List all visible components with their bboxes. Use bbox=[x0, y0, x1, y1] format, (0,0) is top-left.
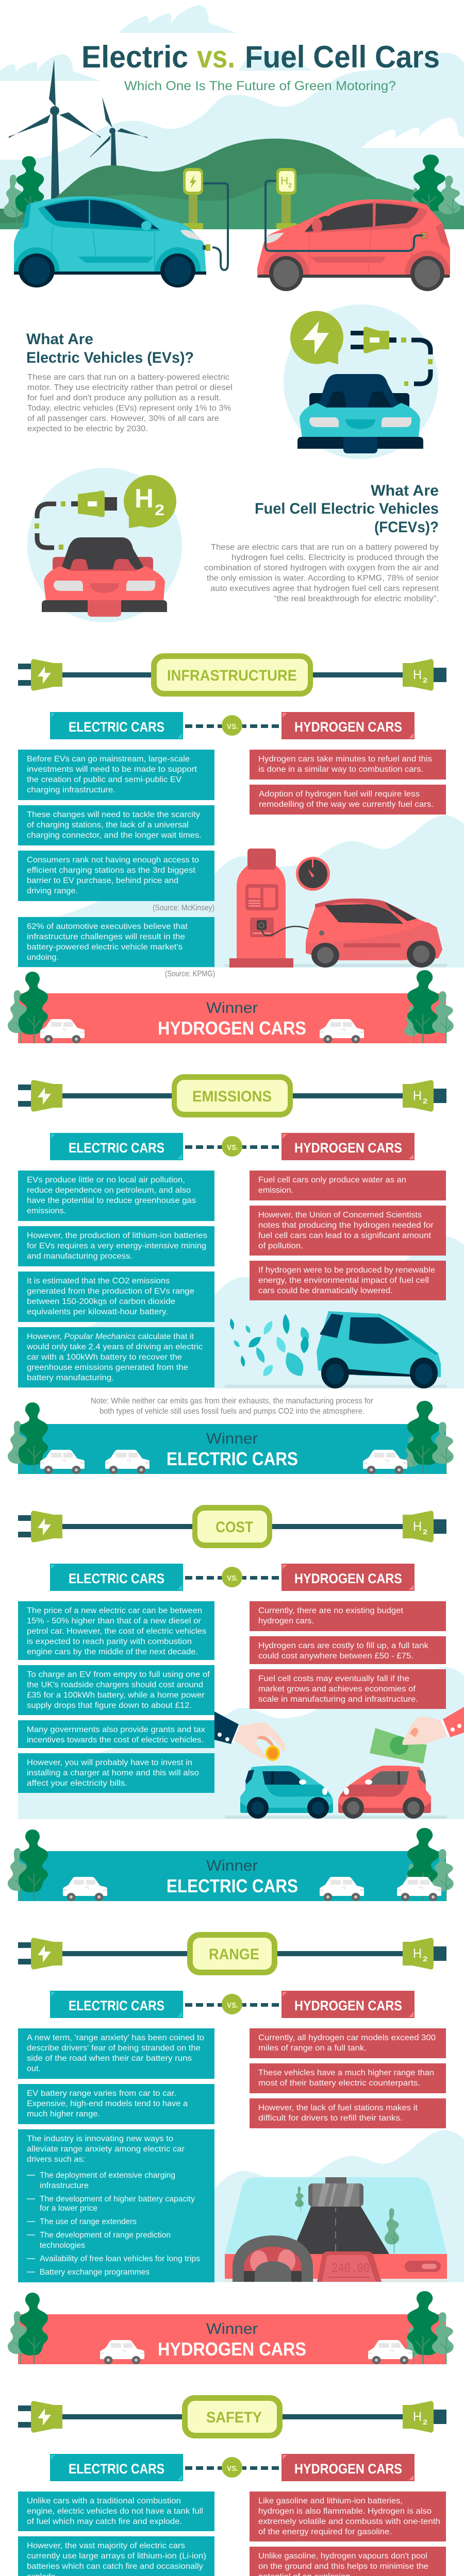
panel: electric emissions 1: reduce dependence on petroleum, and also bbox=[27, 1186, 191, 1195]
section header: infrastructure: 2 bbox=[423, 676, 427, 684]
winner band: cost: ELECTRIC CARS bbox=[167, 1875, 298, 1896]
section header: infrastructure bbox=[18, 653, 446, 697]
panel: electric cost 1 bbox=[18, 1601, 214, 1660]
icon: hydrogen car plugged in: 2 bbox=[155, 502, 164, 519]
cable: electric charger to car bbox=[203, 183, 228, 270]
panel: electric range 1 bbox=[18, 2028, 214, 2079]
panel: electric range 3 with list: alleviate range anxiety among electric car bbox=[27, 2145, 185, 2154]
text: EV definition bbox=[27, 373, 233, 433]
icon: EV plugged into electricity bbox=[284, 304, 438, 459]
panel: hydrogen safety 1: extremely volatile and combusts with one-tenth bbox=[258, 2517, 440, 2526]
panel: electric infrastructure 3: efficient charging stations as the 3rd biggest bbox=[27, 866, 196, 875]
panel: electric emissions 3 bbox=[18, 1272, 214, 1322]
top cloud bbox=[119, 5, 237, 33]
panel: hydrogen infrastructure 2 bbox=[250, 785, 446, 815]
winner band: cost bbox=[8, 1828, 454, 1901]
comparison labels: emissions: VS. bbox=[227, 1143, 238, 1152]
panel: electric emissions 4 bbox=[18, 1327, 214, 1387]
panel: hydrogen infrastructure 2: remodelling of the way we currently fuel cars. bbox=[259, 800, 434, 809]
panel: electric cost 1: 15% - 50% higher than that of a new diesel or bbox=[27, 1617, 201, 1625]
panel: electric range 3 with list bbox=[18, 2129, 214, 2282]
panel: hydrogen cost 2: Hydrogen cars are costly to fill up, a full tank bbox=[258, 1641, 428, 1650]
title bbox=[81, 40, 440, 74]
panel: hydrogen cost 1: hydrogen cars. bbox=[258, 1617, 314, 1625]
panel: hydrogen safety 1: hydrogen is also flammable. Hydrogen is also bbox=[258, 2507, 432, 2516]
panel: electric emissions 1 bbox=[18, 1171, 214, 1221]
panel: hydrogen range 2 bbox=[250, 2063, 446, 2093]
panel: hydrogen safety 1: Like gasoline and lithium-ion batteries, bbox=[258, 2497, 403, 2505]
winner band: range bbox=[8, 2291, 454, 2364]
panel: electric emissions 2 bbox=[18, 1226, 214, 1266]
panel: electric range 1: describe drivers' fear of being stranded on the bbox=[27, 2044, 201, 2053]
comparison labels: safety: HYDROGEN CARS bbox=[294, 2461, 402, 2477]
panel: electric safety 2 bbox=[18, 2536, 214, 2576]
section header: safety: SAFETY bbox=[206, 2409, 262, 2426]
panel: electric emissions 3: between 150-200kgs of carbon dioxide bbox=[27, 1297, 175, 1306]
panel: electric infrastructure 3 bbox=[18, 851, 214, 901]
panel: electric safety 2: batteries which can catch fire and occasionally bbox=[27, 2562, 203, 2571]
panel: electric safety 1: of fuel which may catch fire and explode. bbox=[27, 2517, 182, 2526]
text: FCEV definition: These are electric cars that are run on a battery powered by bbox=[211, 543, 439, 552]
panel: electric emissions 4: However, Popular Mechanics calculate that it bbox=[27, 1332, 194, 1341]
heading: what are EVs: Electric Vehicles (EVs)? bbox=[26, 349, 194, 366]
text: EV definition: for fuel and don't produce any pollution as a result. bbox=[27, 394, 221, 402]
panel: electric infrastructure 1: Before EVs can go mainstream, large-scale bbox=[27, 755, 190, 764]
heading: what are FCEVs: Fuel Cell Electric Vehicles bbox=[255, 500, 439, 517]
comparison labels: safety bbox=[50, 2454, 415, 2481]
panel: electric infrastructure 4: undoing. bbox=[27, 953, 59, 962]
panel: electric cost 2: the UK's roadside chargers should cost around bbox=[27, 1681, 203, 1689]
panel: electric range 2: EV battery range varies from car to car. bbox=[27, 2089, 176, 2098]
heading: what are FCEVs bbox=[255, 482, 439, 536]
panel: electric range 2: much higher range. bbox=[27, 2110, 100, 2119]
comparison labels: range bbox=[50, 1991, 415, 2018]
panel: electric emissions 2: However, the production of lithium-ion batteries bbox=[27, 1231, 207, 1240]
comparison labels: infrastructure: HYDROGEN CARS bbox=[294, 719, 402, 735]
section header: range: H bbox=[413, 1946, 422, 1961]
section header: range: RANGE bbox=[209, 1946, 259, 1963]
title: Fuel Cell Cars bbox=[245, 40, 440, 74]
panel: hydrogen cost 1: Currently, there are no existing budget bbox=[258, 1606, 404, 1615]
panel: electric infrastructure 2: of charging stations, the lack of a universal bbox=[27, 821, 189, 829]
icon: small wind turbine bbox=[90, 97, 147, 167]
panel: hydrogen cost 3: scale in manufacturing and infrastructure. bbox=[258, 1695, 418, 1704]
text: FCEV definition: the only emission is water. According to KPMG, 78% of senior bbox=[207, 574, 439, 583]
illustration: leaves and green car bbox=[18, 1236, 464, 1388]
panel: electric cost 3 bbox=[18, 1720, 214, 1748]
header illustration background bbox=[0, 5, 464, 229]
panel: electric cost 1: petrol car. However, the cost of electric vehicles bbox=[27, 1627, 206, 1636]
car: electric front bbox=[14, 196, 206, 294]
panel: electric infrastructure 4: 62% of automotive executives believe that bbox=[27, 922, 188, 931]
panel: hydrogen cost 3 bbox=[250, 1669, 446, 1709]
section header: emissions: H bbox=[413, 1089, 422, 1103]
panel: electric infrastructure 1: charging infrastructure. bbox=[27, 786, 115, 794]
winner band: infrastructure: Winner bbox=[206, 999, 258, 1016]
charging post: hydrogen: 2 bbox=[288, 182, 292, 189]
panel: electric cost 4: affect your electricity bills. bbox=[27, 1779, 127, 1788]
title: vs. bbox=[197, 40, 235, 74]
comparison labels: infrastructure bbox=[50, 712, 415, 739]
note: manufacturing emissions: Note: While neither car emits gas from their exhausts, the manufacturing process for bbox=[91, 1397, 373, 1405]
panel: electric emissions 3: equivalents per kilowatt-hour battery. bbox=[27, 1308, 168, 1316]
panel: hydrogen emissions 2: However, the Union of Concerned Scientists bbox=[258, 1211, 422, 1219]
comparison labels: range: ELECTRIC CARS bbox=[69, 1998, 164, 2013]
middle cloud bbox=[238, 52, 312, 71]
trees: header right bbox=[410, 155, 460, 224]
panel: electric range 3 with list: technologies bbox=[40, 2241, 85, 2250]
panel: hydrogen cost 1 bbox=[250, 1601, 446, 1631]
panel: electric cost 4 bbox=[18, 1753, 214, 1793]
text: FCEV definition: “the real breakthrough for electric mobility”. bbox=[274, 595, 439, 603]
note: manufacturing emissions: both types of vehicle still uses fossil fuels and pumps CO2 into the atmosphere. bbox=[100, 1407, 364, 1416]
comparison labels: cost: HYDROGEN CARS bbox=[294, 1571, 402, 1586]
panel: electric emissions 1: EVs produce little or no local air pollution, bbox=[27, 1176, 185, 1184]
panel: electric infrastructure 3: barrier to EV purchase, behind price and bbox=[27, 876, 178, 885]
panel: hydrogen cost 3: Fuel cell costs may eventually fall if the bbox=[258, 1674, 409, 1683]
panel: hydrogen cost 2 bbox=[250, 1636, 446, 1664]
panel: hydrogen emissions 2 bbox=[250, 1206, 446, 1256]
panel: hydrogen emissions 3: energy, the environmental impact of fuel cell bbox=[258, 1276, 429, 1285]
right white cloud bbox=[361, 118, 464, 148]
note: manufacturing emissions bbox=[91, 1397, 373, 1416]
panel: electric emissions 3: It is estimated that the CO2 emissions bbox=[27, 1277, 170, 1285]
panel: electric infrastructure 1: the creation of public and semi-public EV bbox=[27, 775, 182, 784]
panel: electric cost 3: incentives towards the cost of electric vehicles. bbox=[27, 1736, 204, 1744]
charging post: hydrogen bbox=[276, 168, 296, 229]
illustration: road through windscreen bbox=[18, 2130, 464, 2282]
panel: electric infrastructure 2: These changes will need to tackle the scarcity bbox=[27, 810, 200, 819]
heading: what are FCEVs: (FCEVs)? bbox=[374, 519, 439, 536]
panel: hydrogen range 2: most of their battery electric counterparts. bbox=[258, 2079, 420, 2088]
section header: emissions bbox=[18, 1074, 446, 1117]
winner band: emissions bbox=[8, 1401, 454, 1474]
panel: electric cost 1: The price of a new electric car can be between bbox=[27, 1606, 202, 1615]
text: EV definition: Today, electric vehicles (EVs) represent only 1% to 3% bbox=[27, 404, 231, 413]
panel: electric cost 4: installing a charger at home and this will also bbox=[27, 1769, 199, 1777]
sky wave bbox=[0, 53, 464, 229]
panel: hydrogen safety 2: on the ground and this helps to minimise the bbox=[258, 2562, 428, 2571]
panel: electric range 3 with list: for a lower price bbox=[40, 2204, 97, 2213]
comparison labels: safety: VS. bbox=[227, 2464, 238, 2473]
panel: electric cost 2: To charge an EV from empty to full using one of bbox=[27, 1670, 210, 1679]
heading: what are FCEVs: What Are bbox=[371, 482, 439, 499]
panel: hydrogen range 1 bbox=[250, 2028, 446, 2058]
panel: electric cost 1: engine cars by the middle of the next decade. bbox=[27, 1648, 198, 1656]
charging post: electric bbox=[183, 168, 203, 229]
illustration: road through windscreen: 240.00 bbox=[332, 2261, 370, 2276]
comparison labels: range: VS. bbox=[227, 2001, 238, 2010]
panel: hydrogen cost 3: market grows and achieves economies of bbox=[258, 1685, 416, 1693]
panel: hydrogen range 3 bbox=[250, 2098, 446, 2128]
section header: cost bbox=[18, 1505, 446, 1548]
left cloud bbox=[0, 54, 101, 81]
panel: hydrogen emissions 1: Fuel cell cars only produce water as an bbox=[258, 1176, 406, 1184]
panel: electric infrastructure 1: investments will need to be made to support bbox=[27, 765, 197, 774]
comparison labels: infrastructure: ELECTRIC CARS bbox=[69, 719, 164, 735]
panel: electric emissions 2: and manufacturing process. bbox=[27, 1252, 132, 1261]
panel: hydrogen range 3: difficult for drivers to refill their tanks. bbox=[258, 2114, 403, 2123]
comparison labels: emissions bbox=[50, 1133, 415, 1160]
panel: electric cost 2: supply drops that figure down to about £12. bbox=[27, 1701, 192, 1710]
icon: hydrogen car plugged in: H bbox=[135, 484, 154, 514]
winner band: range: Winner bbox=[206, 2320, 258, 2337]
heading: what are EVs: What Are bbox=[26, 331, 93, 348]
panel: electric range 3 with list: The use of range extenders bbox=[40, 2217, 137, 2226]
panel: electric range 3 with list: The deployment of extensive charging bbox=[40, 2171, 175, 2180]
title: Electric bbox=[81, 40, 188, 74]
panel: hydrogen emissions 2: notes that producing the hydrogen needed for bbox=[258, 1221, 434, 1230]
panel: hydrogen infrastructure 1: Hydrogen cars take minutes to refuel and this bbox=[258, 755, 432, 764]
panel: hydrogen emissions 3: If hydrogen were to be produced by renewable bbox=[258, 1266, 435, 1275]
panel: hydrogen range 1: miles of range on a full tank. bbox=[258, 2044, 367, 2053]
charging post: hydrogen: H bbox=[280, 175, 288, 187]
panel: hydrogen safety 1 bbox=[250, 2492, 446, 2541]
panel: hydrogen safety 2: Unlike gasoline, hydrogen vapours don't pool bbox=[258, 2552, 427, 2561]
panel: electric range 2: Expensive, high-end models tend to have a bbox=[27, 2099, 188, 2108]
text: FCEV definition bbox=[204, 543, 439, 603]
panel: hydrogen range 3: However, the lack of fuel stations makes it bbox=[258, 2104, 418, 2112]
panel: hydrogen emissions 3: cars could be dramatically lowered. bbox=[258, 1286, 393, 1295]
panel: electric safety 1: Unlike cars with a traditional combustion bbox=[27, 2497, 181, 2505]
panel: electric infrastructure 4: infrastructure challenges will result in the bbox=[27, 933, 185, 941]
panel: hydrogen range 2: These vehicles have a much higher range than bbox=[258, 2069, 434, 2077]
comparison labels: range: HYDROGEN CARS bbox=[294, 1998, 402, 2013]
section header: cost: COST bbox=[216, 1519, 253, 1536]
text: FCEV definition: auto executives agree that hydrogen fuel cell cars represent bbox=[210, 584, 439, 593]
comparison labels: emissions: HYDROGEN CARS bbox=[294, 1140, 402, 1156]
source: KPMG: (Source: KPMG) bbox=[165, 970, 215, 978]
panel: electric infrastructure 3: Consumers rank not having enough access to bbox=[27, 856, 199, 865]
panel: electric emissions 1: have the potential to reduce greenhouse gas bbox=[27, 1196, 196, 1205]
panel: electric infrastructure 4: battery-powered electric vehicle market's bbox=[27, 943, 183, 952]
icon: hydrogen car plugged in bbox=[27, 468, 182, 622]
section header: safety: H bbox=[413, 2410, 422, 2424]
icon: large wind turbine bbox=[9, 59, 101, 201]
panel: hydrogen emissions 1 bbox=[250, 1171, 446, 1200]
panel: electric range 3 with list: The development of range prediction bbox=[40, 2231, 171, 2240]
panel: electric emissions 4: greenhouse emissions generated from the bbox=[27, 1363, 188, 1372]
panel: hydrogen cost 2: could cost anywhere between £50 - £75. bbox=[258, 1652, 413, 1660]
panel: hydrogen infrastructure 2: Adoption of hydrogen fuel will require less bbox=[259, 790, 420, 799]
panel: electric safety 1 bbox=[18, 2492, 214, 2531]
panel: electric range 1: out. bbox=[27, 2064, 41, 2073]
panel: electric safety 2: However, the vast majority of electric cars bbox=[27, 2541, 185, 2550]
comparison labels: safety: ELECTRIC CARS bbox=[69, 2461, 164, 2477]
panel: hydrogen safety 2 bbox=[250, 2547, 446, 2576]
panel: electric range 3 with list: The development of higher battery capacity bbox=[40, 2195, 195, 2204]
panel: hydrogen emissions 2: of pollution. bbox=[258, 1242, 303, 1250]
panel: electric emissions 1: emissions. bbox=[27, 1207, 66, 1215]
panel: electric cost 1: is expected to reach parity with combustion bbox=[27, 1637, 192, 1646]
winner band: infrastructure: HYDROGEN CARS bbox=[158, 1018, 306, 1039]
text: FCEV definition: hydrogen fuel cells. Electricity is produced through the bbox=[231, 553, 439, 562]
panel: electric cost 2: £35 for a 100kWh battery, while a home power bbox=[27, 1691, 205, 1700]
section header: range bbox=[18, 1932, 446, 1975]
panel: electric infrastructure 2: charging connector, and the longer wait times. bbox=[27, 831, 202, 840]
panel: electric cost 2 bbox=[18, 1665, 214, 1715]
panel: hydrogen emissions 1: emission. bbox=[258, 1186, 293, 1195]
panel: electric range 2 bbox=[18, 2084, 214, 2124]
panel: hydrogen emissions 3 bbox=[250, 1261, 446, 1300]
text: EV definition: motor. They use electricity rather than petrol or diesel bbox=[27, 383, 233, 392]
panel: electric emissions 4: would only take 2.4 years of driving an electric bbox=[26, 1343, 203, 1351]
section header: range: 2 bbox=[423, 1955, 427, 1963]
comparison labels: cost bbox=[50, 1564, 415, 1591]
section header: cost: 2 bbox=[423, 1528, 427, 1536]
heading: what are EVs bbox=[26, 331, 194, 366]
illustration: charging station bbox=[18, 816, 464, 968]
section header: infrastructure: INFRASTRUCTURE bbox=[167, 667, 297, 684]
car: hydrogen front bbox=[257, 199, 450, 297]
text: EV definition: These are cars that run on a battery-powered electric bbox=[27, 373, 229, 382]
panel: electric safety 2: currently use large arrays of lithium-ion (Li-ion) bbox=[27, 2552, 206, 2561]
cable: hydrogen charger to car bbox=[266, 181, 423, 251]
panel: electric range 1: side of the road when their car battery runs bbox=[27, 2054, 192, 2063]
panel: hydrogen range 1: Currently, all hydrogen car models exceed 300 bbox=[258, 2033, 436, 2042]
panel: electric infrastructure 1 bbox=[18, 750, 214, 800]
panel: electric range 3 with list: The industry is innovating new ways to bbox=[27, 2134, 173, 2143]
panel: electric range 3 with list: infrastructure bbox=[40, 2181, 89, 2190]
panel: electric emissions 2: for EVs requires a very energy-intensive mining bbox=[27, 1242, 206, 1250]
panel: electric range 3 with list: Availability of free loan vehicles for long trips bbox=[40, 2255, 200, 2263]
section header: safety bbox=[18, 2395, 446, 2438]
section header: safety: 2 bbox=[423, 2418, 427, 2426]
panel: electric range 3 with list: Battery exchange programmes bbox=[40, 2268, 150, 2277]
panel: electric emissions 3: generated from the production of EVs range bbox=[27, 1287, 194, 1296]
text: EV definition: of all passenger cars. However, 30% of all cars are bbox=[27, 414, 219, 423]
section header: emissions: 2 bbox=[423, 1097, 427, 1105]
section header: infrastructure: H bbox=[413, 668, 422, 682]
panel: electric range 3 with list: drivers such as: bbox=[27, 2155, 85, 2164]
panel: electric infrastructure 2 bbox=[18, 805, 214, 845]
hills bbox=[0, 139, 464, 229]
panel: electric cost 4: However, you will probably have to invest in bbox=[27, 1758, 192, 1767]
text: EV definition: expected to be electric by 2030. bbox=[27, 425, 148, 433]
panel: electric infrastructure 3: driving range. bbox=[27, 887, 78, 895]
section header: emissions: EMISSIONS bbox=[192, 1088, 272, 1105]
winner band: infrastructure bbox=[8, 970, 454, 1043]
panel: hydrogen emissions 2: fuel cell cars can lead to a significant amount bbox=[258, 1231, 432, 1240]
trees: header left bbox=[4, 156, 44, 228]
panel: electric infrastructure 4 bbox=[18, 917, 214, 967]
text: FCEV definition: combination of stored hydrogen with oxygen from the air and bbox=[204, 564, 439, 572]
panel: electric cost 3: Many governments also provide grants and tax bbox=[27, 1725, 205, 1734]
comparison labels: emissions: ELECTRIC CARS bbox=[69, 1140, 164, 1156]
comparison labels: cost: VS. bbox=[227, 1574, 238, 1583]
winner band: emissions: Winner bbox=[206, 1430, 258, 1447]
comparison labels: infrastructure: VS. bbox=[227, 722, 238, 731]
subtitle: Which One Is The Future of Green Motoring? bbox=[124, 79, 396, 93]
panel: electric emissions 4: car with a 100kWh battery to recover the bbox=[27, 1353, 182, 1362]
panel: electric emissions 4: battery manufacturing. bbox=[27, 1374, 114, 1382]
source: McKinsey: (Source: McKinsey) bbox=[153, 904, 214, 912]
winner band: cost: Winner bbox=[206, 1857, 258, 1874]
panel: hydrogen infrastructure 1: is done in a similar way to combustion cars. bbox=[258, 765, 423, 774]
panel: electric safety 1: engine, electric vehicles do not have a tank full bbox=[27, 2507, 203, 2516]
panel: hydrogen infrastructure 1 bbox=[250, 750, 446, 779]
winner band: range: HYDROGEN CARS bbox=[158, 2338, 306, 2360]
comparison labels: cost: ELECTRIC CARS bbox=[69, 1571, 164, 1586]
section header: cost: H bbox=[413, 1519, 422, 1534]
panel: electric range 1: A new term, 'range anxiety' has been coined to bbox=[27, 2033, 204, 2042]
illustration: paying for cars bbox=[18, 1667, 464, 1819]
panel: hydrogen safety 1: of the energy required for gasoline. bbox=[258, 2528, 392, 2536]
winner band: emissions: ELECTRIC CARS bbox=[167, 1448, 298, 1469]
